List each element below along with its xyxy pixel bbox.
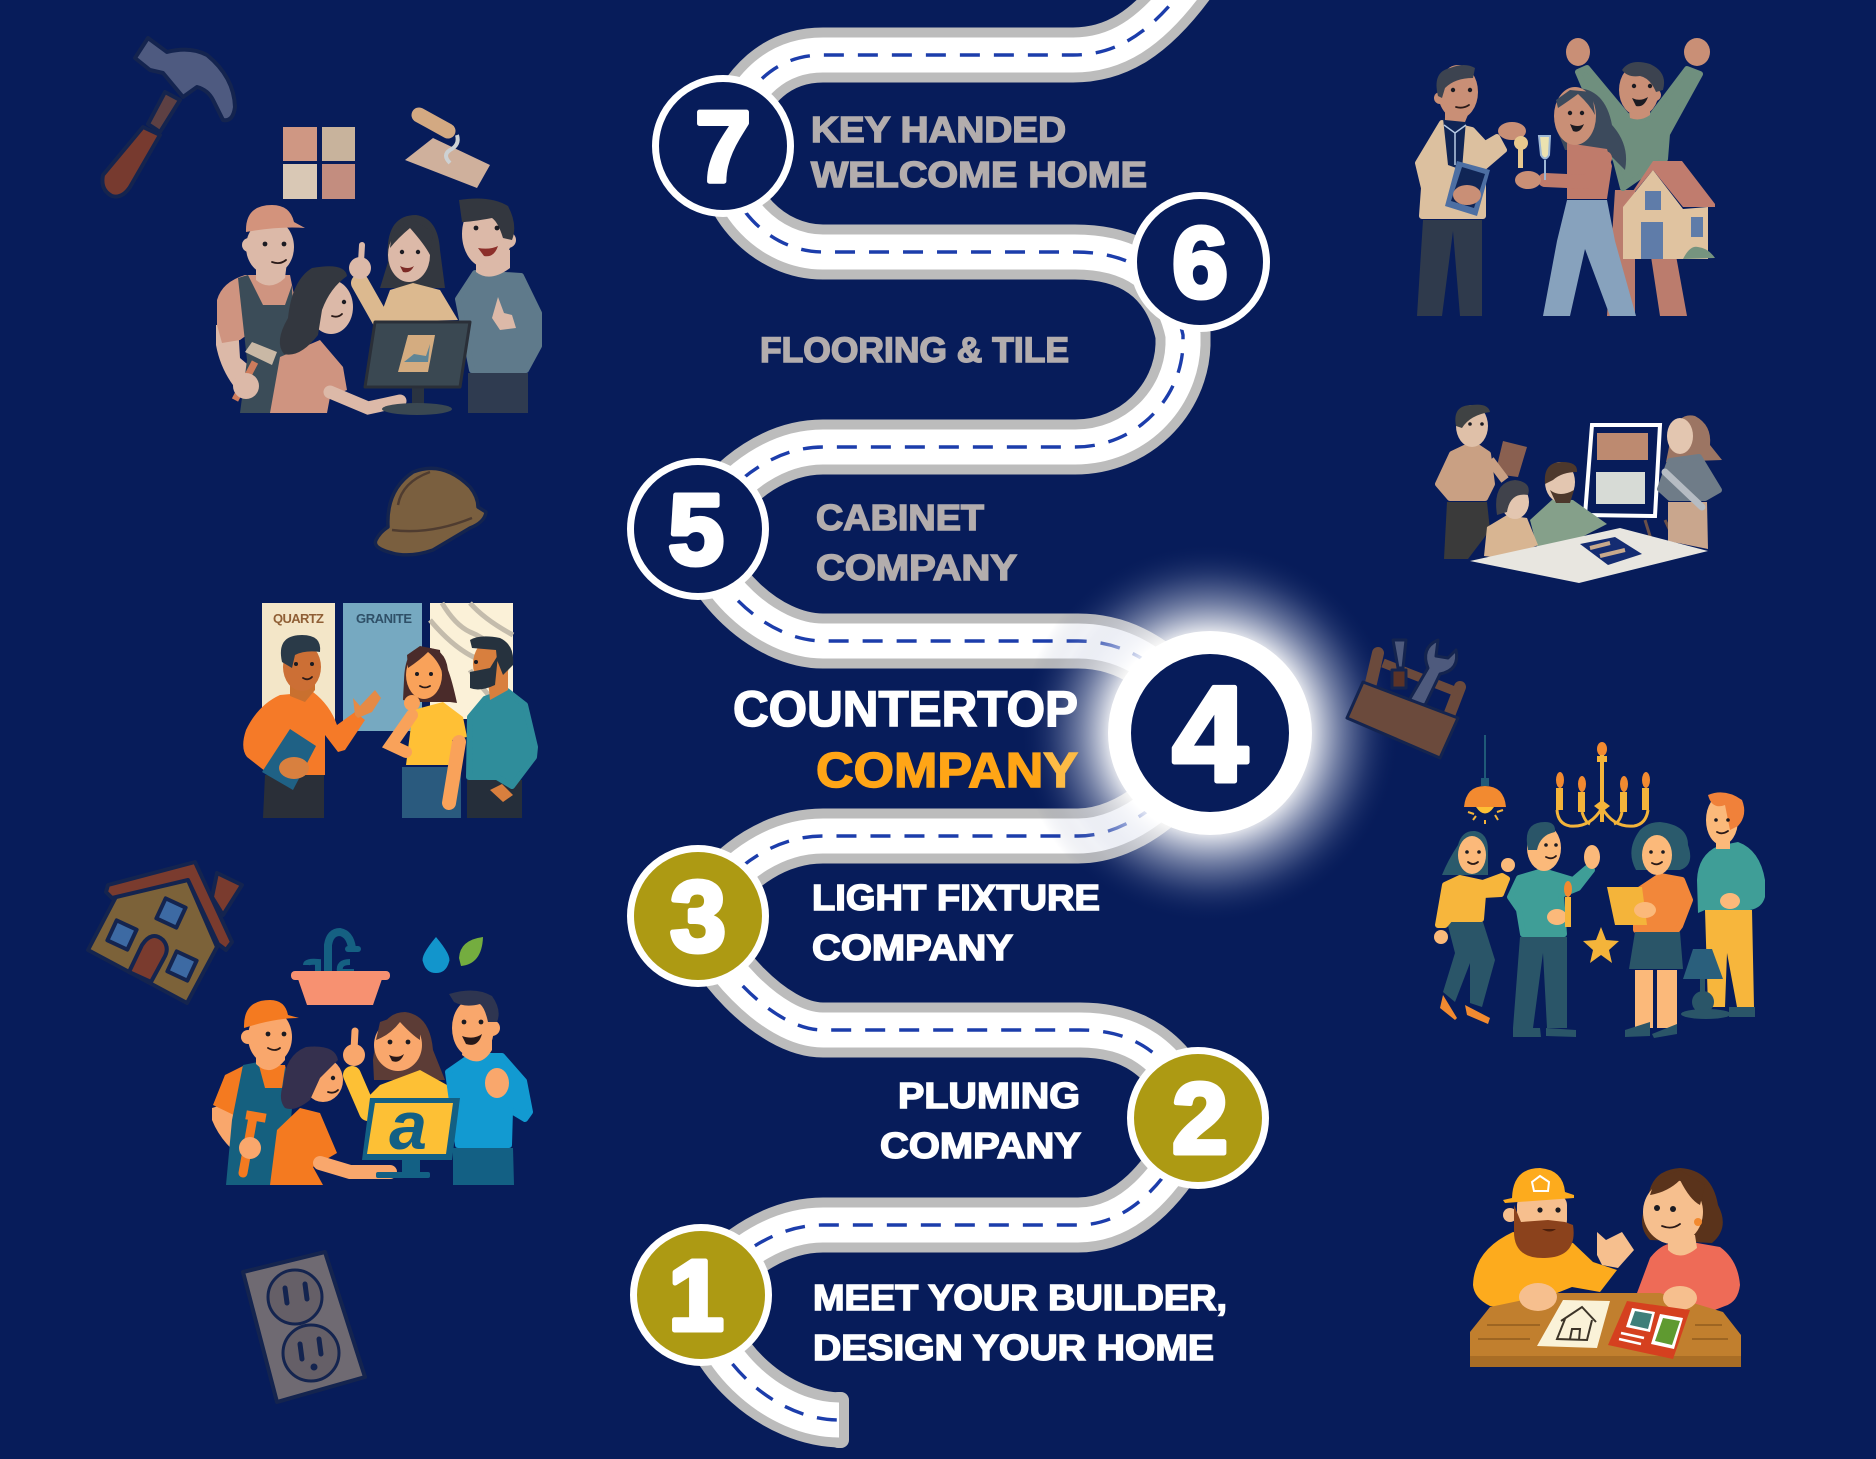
step 7 marker: 7 bbox=[695, 91, 751, 203]
display board bbox=[1585, 425, 1680, 552]
celebrating man bbox=[1566, 38, 1710, 316]
girl in yellow bbox=[1434, 831, 1515, 1024]
woman client bbox=[1637, 1168, 1740, 1313]
label: step 2 bbox=[880, 1075, 1081, 1166]
icon: hammer bbox=[102, 38, 235, 197]
label: step 5 bbox=[816, 497, 1017, 588]
step 3 marker bbox=[630, 848, 766, 984]
step 1 marker: 1 bbox=[668, 1240, 724, 1352]
bearded man in teal bbox=[467, 636, 535, 818]
icon: notched trowel bbox=[405, 115, 490, 188]
agent with clipboard bbox=[1417, 65, 1528, 316]
step 3 marker: 3 bbox=[670, 861, 726, 973]
step 1 marker bbox=[634, 1228, 768, 1362]
woman at computer bbox=[270, 1047, 390, 1185]
label: step 2: PLUMING bbox=[898, 1075, 1080, 1116]
man in orange shirt bbox=[243, 635, 381, 818]
plumber with wrench bbox=[212, 1000, 299, 1185]
step 6 marker bbox=[1134, 196, 1266, 328]
house sketch paper bbox=[1537, 1300, 1610, 1348]
illustration: tile design team bbox=[216, 198, 539, 415]
illustration: cabinet planning team bbox=[1438, 405, 1722, 583]
chandelier bbox=[1556, 742, 1650, 826]
illustration: plumbing team bbox=[212, 932, 530, 1185]
step 6 marker: 6 bbox=[1172, 207, 1228, 319]
step 5 marker: 5 bbox=[668, 474, 724, 586]
desktop monitor with letter bbox=[362, 1088, 460, 1178]
seated woman at screen bbox=[270, 266, 400, 413]
seated bearded man bbox=[1530, 462, 1607, 547]
seated woman bbox=[1484, 480, 1538, 559]
icon: floor tiles bbox=[283, 127, 355, 199]
label: step 3: LIGHT FIXTURE bbox=[812, 877, 1100, 918]
label: step 3: COMPANY bbox=[812, 927, 1013, 968]
pointing woman bbox=[349, 215, 458, 322]
road end cap bbox=[830, 1392, 849, 1448]
label: step 5: COMPANY bbox=[816, 547, 1017, 588]
man in blue sweater bbox=[448, 990, 530, 1185]
step 4 marker: 4 bbox=[1172, 658, 1248, 810]
planning table bbox=[1470, 528, 1708, 583]
woman with tablet bbox=[1607, 822, 1690, 1038]
stone sample panels: GRANITE bbox=[356, 611, 412, 626]
step 2 marker bbox=[1130, 1050, 1266, 1186]
step 5 marker bbox=[630, 462, 766, 596]
label: step 4: COUNTERTOP bbox=[733, 681, 1078, 737]
bearded builder bbox=[1473, 1168, 1634, 1310]
man in yellow trousers bbox=[1697, 792, 1765, 1017]
winding road bbox=[698, 0, 1210, 1448]
desktop monitor with letter: a bbox=[389, 1088, 427, 1164]
small house bbox=[1623, 161, 1715, 259]
label: step 7 bbox=[811, 109, 1147, 195]
label: step 4 bbox=[733, 681, 1078, 798]
highlight glow behind step 4 bbox=[1020, 543, 1400, 923]
illustration: key handover bbox=[1417, 38, 1715, 316]
sink and faucet bbox=[291, 932, 390, 1005]
icon: wall outlet bbox=[243, 1252, 365, 1402]
long haired woman in yellow bbox=[343, 1012, 452, 1115]
label: step 6: FLOORING & TILE bbox=[760, 331, 1069, 370]
step 7 marker bbox=[656, 78, 790, 214]
table lamp bbox=[1681, 949, 1731, 1019]
pendant lamp bbox=[1464, 735, 1506, 824]
man with candle bbox=[1510, 822, 1600, 1037]
icon: water drop bbox=[423, 937, 449, 973]
builder with brush bbox=[216, 205, 305, 413]
label: step 1 bbox=[813, 1277, 1227, 1368]
illustration: light fixtures group bbox=[1434, 735, 1765, 1038]
star bbox=[1583, 927, 1619, 963]
man in blue sweater bbox=[458, 198, 539, 413]
illustration: countertop selection bbox=[243, 603, 535, 818]
icon: leaf bbox=[459, 937, 483, 966]
label: step 5: CABINET bbox=[816, 497, 984, 538]
icon: hard hat bbox=[375, 468, 486, 555]
man with sample board bbox=[1438, 405, 1527, 559]
wooden table bbox=[1470, 1283, 1741, 1367]
label: step 3 bbox=[812, 877, 1100, 968]
label: step 1: DESIGN YOUR HOME bbox=[813, 1327, 1214, 1368]
brochure bbox=[1608, 1301, 1690, 1359]
label: step 2: COMPANY bbox=[880, 1125, 1081, 1166]
woman with wrench bbox=[1660, 415, 1722, 549]
step 4 marker bbox=[1120, 642, 1300, 824]
label: step 7: KEY HANDED bbox=[811, 109, 1066, 150]
illustration: builder meets client bbox=[1470, 1168, 1741, 1367]
desktop monitor bbox=[365, 322, 470, 415]
stone sample panels bbox=[262, 603, 513, 731]
icon: house bbox=[88, 862, 242, 1003]
woman with glass bbox=[1515, 87, 1636, 316]
icon: toolbox bbox=[1347, 640, 1460, 758]
woman in yellow tee bbox=[391, 646, 467, 818]
step 2 marker: 2 bbox=[1172, 1063, 1228, 1175]
stone sample panels: QUARTZ bbox=[273, 611, 324, 626]
label: step 1: MEET YOUR BUILDER, bbox=[813, 1277, 1227, 1318]
label: step 4: COMPAN Y bbox=[816, 744, 1078, 798]
label: step 7: WELCOME HOME bbox=[811, 154, 1147, 195]
